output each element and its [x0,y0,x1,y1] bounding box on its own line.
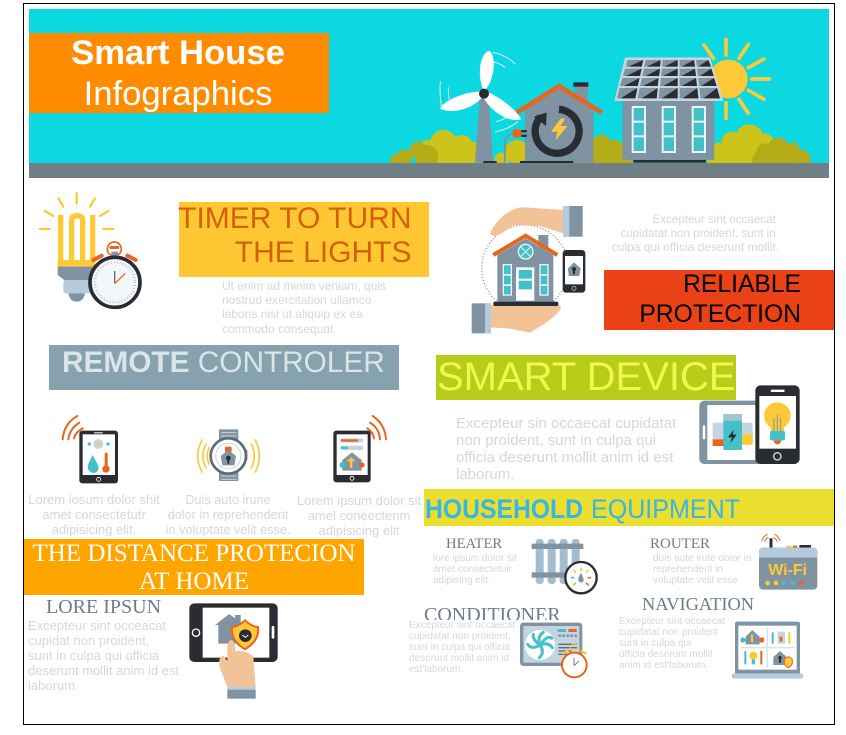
item: conditioner [405,604,587,677]
item: conditioner: est'laborum. [409,664,463,675]
icon: tablet with thermostat [333,416,386,482]
item: navigation: officia deserunt mollit [619,649,713,660]
icon: wi-fi router: Wi-Fi [768,562,807,579]
title block: Infographics [84,75,272,113]
item: router: voluptate velit esse [653,575,738,586]
caption: middle: in voluptate velit esse. [166,523,290,537]
text block: cupidat non proident, [28,633,149,648]
heading: AT HOME [139,568,249,595]
item: router: ROUTER [650,536,710,552]
item: heater: lore ipsum dolor sit [433,553,517,564]
caption: left: Lorem iosum dolor shit [28,492,160,507]
icon: tablet and phone with bulb [699,385,800,464]
heading: HOUSEHOLD [425,494,583,524]
caption: right: Lorem ipsum dolor sit [297,493,422,508]
icon: hands protecting house [472,206,585,333]
title block: Smart House [71,34,285,72]
heading [24,539,364,595]
item: navigation: Excepteur sint occaecat [619,616,725,627]
text block: cupidatat non proident, sunt in [620,227,776,240]
text block: non proident, sunt in culpa qui [456,432,656,449]
caption: left: amet consectetutr [42,507,146,522]
item: conditioner: sunt in culpa qui officia [409,642,510,653]
heading: REMOTE CONTROLER [62,346,385,379]
item: heater: HEATER [446,536,502,552]
heading: THE DISTANCE PROTECION [32,540,356,567]
caption: right: adipisicing elit [319,523,400,538]
icon: tablet with temperature [63,416,118,483]
text block: Excepteur sin occaecat cupidatat [456,415,677,432]
heading: TIMER TO TURN [178,202,412,235]
icon: laptop with smart home apps [732,622,803,679]
heading [178,202,429,277]
caption: right: amel coneectenm [308,508,410,523]
subheading: LORE IPSUN [46,596,161,618]
caption: middle: Duis auto irune [185,493,271,507]
icon: hand tapping tablet with shield [189,603,278,699]
heading: RELIABLE [683,271,801,298]
item: navigation: cupidatat non proident [619,627,718,638]
text block: officia deserunt mollit anim id est [456,449,674,466]
item: router: duis aute irute doior in [653,553,751,564]
text block: Excepteur sint occeacat [28,618,166,633]
icon: light bulb with stopwatch [40,193,140,307]
text block: nostrud exercitation ullamco [222,293,372,307]
item: conditioner: cupidatat non proident, [409,631,511,642]
panel: the distance protecion at home [24,539,364,699]
text block: laboris nisi ut aliquip ex ea [222,307,363,321]
heading: SMART DEVICE [437,355,736,399]
heading [424,489,834,526]
icon: radiator [532,539,597,593]
item: router: reprehenderit in [653,564,723,575]
item: heater: adipising elit. [433,575,491,586]
title block [29,33,329,113]
heading: THE LIGHTS [235,236,412,269]
panel: reliable protection [472,206,834,333]
heading: EQUIPMENT [591,494,740,524]
icon: smart watch alarm [198,429,259,481]
item: conditioner: Excepteur sint occaecat [409,620,515,631]
text block: Ut enim ad minim veniam, quis [222,279,386,293]
text block: Excepteur sint occaecat [653,213,776,226]
item: heater [433,536,597,593]
item: navigation: NAVIGATION [642,594,754,614]
text block: sunt in culpa qui officia [28,648,160,663]
item: conditioner: deserunt mollit anim id [409,653,509,664]
text block: deserunt mollit anim id est [28,663,179,678]
text block: culpa qui officia deserunt mollit. [612,240,779,254]
caption: middle: dolor in reprehenderit [168,508,289,522]
item: conditioner: CONDITIONER [424,604,561,626]
item: navigation: anim id est'laborum. [619,660,708,671]
heading [49,345,399,390]
text block: laborum. [28,678,79,693]
item: navigation: sunt in culpa qui [619,638,691,649]
icon: air conditioner with clock [520,623,587,677]
caption: left: adipisicing elit. [52,522,136,537]
panel: household equipment [405,489,834,679]
heading: PROTECTION [639,301,801,328]
text block: laborum. [456,466,514,483]
item: heater: amet consectetuir [433,564,513,575]
panel: smart device [436,355,800,483]
item: navigation [619,594,803,679]
panel: header banner [29,9,829,178]
icons: remote devices [63,416,386,483]
icon: wi-fi router [759,534,817,590]
illustration: smart houses with wind turbine and sun [380,39,829,178]
panel: timer to turn the lights [40,193,429,336]
heading [604,270,834,330]
text block: commodo consequat [222,322,334,336]
item: router [650,534,817,590]
panel: remote controler [28,345,422,538]
